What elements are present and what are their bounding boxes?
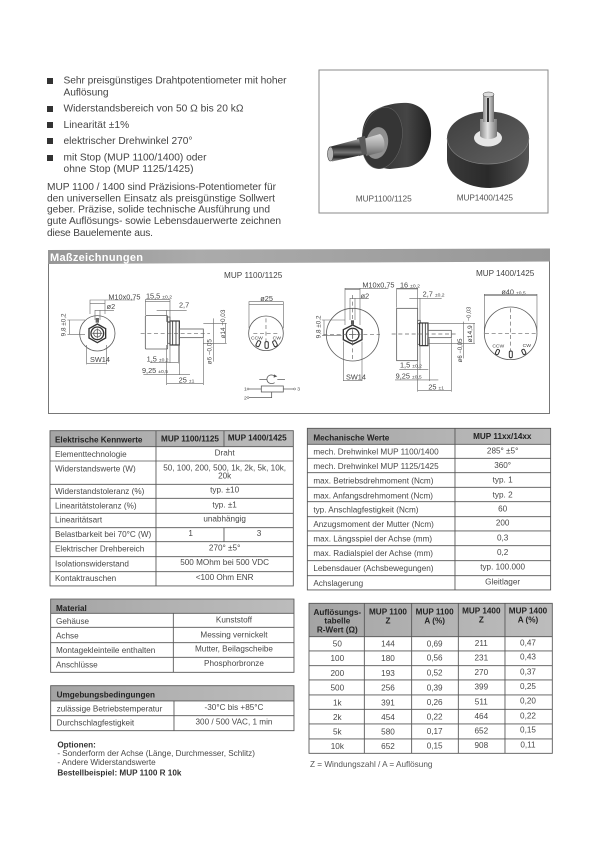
circuit symbol: 1	[244, 387, 247, 393]
table rows: Phosphorbronze	[204, 659, 264, 668]
table values: typ. 1	[493, 476, 513, 485]
circuit symbol	[244, 374, 300, 401]
front view: SW14	[90, 355, 110, 364]
table values: 20k	[218, 471, 232, 480]
table rows: Durchschlagfestigkeit	[57, 719, 135, 728]
table values: typ. 2	[493, 490, 513, 499]
table labels: Elektrischer Drehbereich	[55, 545, 144, 554]
table header	[307, 428, 551, 444]
table values: unabhängig	[203, 515, 246, 524]
column: R-Wert: 5k	[333, 727, 343, 736]
column: MUP 1400 A: 0,47	[520, 638, 536, 647]
front view: M10x0,75	[362, 281, 395, 290]
intro paragraph: gute Auflösungs- sowie Lebensdauerwerte zeichnen	[47, 216, 281, 227]
column: MUP 1400 Z: 652	[475, 726, 489, 735]
table header: A (%)	[424, 616, 445, 625]
table values: 200	[496, 519, 510, 528]
table labels: mech. Drehwinkel MUP 1100/1400	[313, 448, 439, 457]
column: MUP 1100 Z: 580	[381, 727, 395, 736]
table header: MUP 1100/1125	[161, 435, 219, 444]
side view: ø6 −0,05	[206, 339, 213, 364]
table labels: typ. Anschlagfestigkeit (Ncm)	[313, 506, 419, 515]
column: MUP 1400 A: 0,11	[520, 740, 536, 749]
table: Umgebungsbedingungen	[51, 686, 294, 731]
side view: 1,5 ±0,2	[400, 361, 422, 370]
column: MUP 1100 Z: 256	[381, 684, 395, 693]
table rows: Montagekleinteile enthalten	[56, 646, 155, 655]
column: MUP 1400 A: 0,37	[520, 667, 536, 676]
rear view: CW	[273, 335, 281, 341]
table header: A (%)	[518, 616, 539, 625]
column: MUP 1400 Z: 270	[475, 668, 489, 677]
options and order example	[57, 740, 255, 778]
table header: MUP 11xx/14xx	[473, 432, 532, 441]
side view: 2,7	[179, 301, 189, 310]
drawing title: MUP 1100/1125	[224, 271, 283, 280]
column: MUP 1100 A: 0,17	[427, 727, 443, 736]
table labels: Isolationswiderstand	[55, 560, 129, 569]
column: R-Wert: 100	[331, 654, 345, 663]
table values	[480, 447, 526, 586]
table labels: Lebensdauer (Achsbewegungen)	[313, 564, 434, 573]
table labels: Kontaktrauschen	[55, 574, 116, 583]
column: MUP 1100 A	[427, 639, 443, 751]
intro paragraph: diese Bauelemente aus.	[47, 228, 153, 239]
table rows: -30°C bis +85°C	[205, 703, 264, 712]
table rows: Messing vernickelt	[200, 630, 268, 639]
column: R-Wert: 500	[331, 684, 345, 693]
table rows: zulässige Betriebstemperatur	[57, 704, 163, 713]
front view: ø2	[361, 291, 369, 300]
table rows: Kunststoff	[216, 616, 253, 625]
table values: 285° ±5°	[487, 447, 518, 456]
column: MUP 1100 A: 0,69	[427, 639, 443, 648]
column: MUP 1100 A: 0,22	[427, 713, 443, 722]
bullet 1: Sehr preisgünstiges Drahtpotentiometer mit hoher	[64, 76, 287, 86]
bullet 5: mit Stop (MUP 1100/1400) oder	[64, 153, 207, 164]
side view: 1,5 ±0,2	[147, 354, 169, 363]
side view: 2,7 ±0,2	[423, 290, 445, 299]
table: Auflösungstabelle	[309, 603, 552, 753]
table values: typ. ±1	[212, 500, 237, 509]
column: R-Wert: 50	[333, 640, 342, 649]
bullet 3: Linearität ±1%	[64, 120, 129, 131]
bullet 2: Widerstandsbereich von 50 Ω bis 20 kΩ	[64, 104, 244, 114]
table values	[163, 449, 286, 582]
rear view	[249, 294, 283, 351]
table header	[50, 431, 293, 447]
table labels: Widerstandstoleranz (%)	[55, 487, 145, 496]
column: MUP 1400 A: 0,20	[520, 697, 536, 706]
table header	[51, 599, 294, 613]
table values: 500 MOhm bei 500 VDC	[180, 558, 269, 567]
drawing: MUP 1100/1125	[60, 271, 300, 401]
table: Material	[51, 599, 294, 672]
intro paragraph: den universellen Einsatz als preisgünstige Sollwert	[47, 194, 275, 205]
rear view: CW	[523, 343, 531, 349]
intro paragraph: geber. Präzise, solide technische Ausführung und	[47, 205, 270, 216]
side view: 9,25 ±0,5	[142, 366, 168, 375]
rear view: ø40 ±0,5	[501, 287, 526, 296]
column: MUP 1400 Z	[475, 639, 489, 750]
column: MUP 1100 A: 0,26	[427, 698, 443, 707]
column: MUP 1400 A: 0,43	[520, 653, 536, 662]
bullet 1	[47, 76, 287, 98]
side view: 16 ±0,2	[400, 280, 420, 289]
table labels: max. Längsspiel der Achse (mm)	[313, 535, 432, 544]
panel: Maßzeichnungen	[48, 248, 550, 414]
side view: ø14,9	[467, 325, 474, 342]
bullet 5: ohne Stop (MUP 1125/1425)	[64, 164, 194, 175]
bullet 1: Auflösung	[64, 88, 109, 98]
table header: MUP 1100	[369, 607, 407, 616]
table header: Material	[56, 604, 87, 613]
intro paragraph	[47, 182, 281, 239]
column: MUP 1100 Z: 180	[381, 654, 395, 663]
rear view: CCW	[492, 344, 505, 350]
table header	[51, 686, 294, 701]
table labels: Widerstandswerte (W)	[55, 465, 136, 474]
bullet 5	[47, 153, 207, 175]
side view	[392, 280, 475, 392]
table header: Z	[479, 616, 484, 625]
column: MUP 1400 Z: 211	[475, 639, 488, 648]
circuit symbol: 2	[244, 395, 247, 401]
panel heading bar: Maßzeichnungen	[50, 252, 143, 264]
column: R-Wert: 2k	[333, 713, 343, 722]
table: Elektrische Kennwerte	[50, 431, 293, 586]
front view	[316, 281, 395, 381]
drawing: MUP 1400/1425	[316, 269, 537, 392]
front view: SW14	[346, 372, 366, 381]
table rows: Gehäuse	[56, 617, 90, 626]
side view: −0,03	[467, 307, 473, 321]
table labels	[55, 450, 151, 583]
table values: 0,3	[497, 534, 509, 543]
table header: R-Wert (Ω)	[317, 625, 358, 634]
table values: 0,2	[497, 548, 509, 557]
options and order example: Optionen:	[57, 740, 96, 749]
table header: MUP 1400	[509, 607, 548, 616]
table values: 360°	[494, 461, 511, 470]
column: MUP 1100 A: 0,56	[427, 654, 443, 663]
table labels: max. Anfangsdrehmoment (Ncm)	[313, 491, 433, 500]
table rows: Mutter, Beilagscheibe	[195, 645, 273, 654]
front view	[60, 292, 141, 364]
column: MUP 1400 A: 0,15	[520, 726, 536, 735]
table header: Mechanische Werte	[313, 433, 390, 442]
photo caption right: MUP1400/1425	[457, 193, 513, 203]
table labels: Linearitätstoleranz (%)	[55, 501, 137, 510]
column: MUP 1100 Z: 193	[381, 669, 395, 678]
column: MUP 1400 A: 0,25	[520, 682, 536, 691]
side view	[141, 291, 227, 385]
product photo panel	[319, 70, 548, 213]
table labels: max. Radialspiel der Achse (mm)	[313, 549, 433, 558]
table values: Draht	[215, 449, 235, 458]
side view: 25 ±1	[428, 382, 444, 391]
table rows: Achse	[56, 632, 79, 641]
column: MUP 1100 Z: 144	[381, 640, 395, 649]
rear view	[484, 287, 537, 360]
side view: 9,25 ±0,5	[396, 371, 422, 380]
table rows	[56, 616, 273, 669]
rear view: ø25	[260, 294, 273, 303]
side view: 25 ±1	[179, 375, 195, 384]
table values: typ. ±10	[210, 486, 240, 495]
table labels: Linearitätsart	[55, 516, 103, 525]
table: Mechanische Werte	[307, 428, 551, 590]
table labels: mech. Drehwinkel MUP 1125/1425	[313, 462, 439, 471]
table header: MUP 1400/1425	[228, 434, 287, 443]
table rows: Anschlüsse	[56, 660, 98, 669]
table header: Z	[385, 616, 390, 625]
circuit symbol: 3	[297, 387, 300, 393]
column: MUP 1400 Z: 399	[475, 683, 489, 692]
column: MUP 1100 Z: 391	[381, 698, 395, 707]
table header: Elektrische Kennwerte	[55, 436, 143, 445]
table footnote: Z = Windungszahl / A = Auflösung	[310, 760, 433, 769]
table header	[309, 603, 552, 637]
table labels: max. Betriebsdrehmoment (Ncm)	[313, 477, 434, 486]
bullet 4: elektrischer Drehwinkel 270°	[64, 136, 192, 147]
column: R-Wert: 1k	[333, 698, 343, 707]
table values: <100 Ohm ENR	[196, 573, 254, 582]
column: MUP 1400 Z: 464	[475, 712, 489, 721]
table values: 3	[257, 529, 262, 538]
column: MUP 1400 Z: 908	[475, 741, 489, 750]
column: R-Wert	[331, 640, 345, 751]
front view: 9,8 ±0,2	[316, 315, 323, 338]
feature list	[47, 76, 287, 175]
intro paragraph: MUP 1100 / 1400 sind Präzisions-Potentiometer für	[47, 182, 277, 193]
panel heading bar	[48, 248, 550, 264]
column: MUP 1400 A: 0,22	[520, 711, 536, 720]
side view: ø14 −0,03	[220, 309, 227, 338]
drawing title: MUP 1400/1425	[476, 269, 535, 278]
table header: Umgebungsbedingungen	[57, 691, 155, 700]
column: MUP 1100 Z: 454	[381, 713, 395, 722]
options and order example: - Andere Widerstandswerte	[57, 758, 156, 767]
table header: tabelle	[324, 616, 351, 625]
front view: 9,8 ±0,2	[60, 313, 67, 336]
side view: ø6 −0,05	[458, 338, 464, 362]
column: R-Wert: 10k	[331, 742, 345, 751]
column: MUP 1100 A: 0,39	[427, 683, 443, 692]
table values: 1	[188, 529, 193, 538]
table labels	[313, 448, 439, 588]
front view: M10x0,75	[108, 292, 141, 301]
column: R-Wert: 200	[331, 669, 345, 678]
column: MUP 1100 Z	[381, 640, 395, 751]
column: MUP 1100 A: 0,15	[427, 742, 443, 751]
photo: MUP1400 potentiometer	[447, 92, 529, 188]
table labels: Achslagerung	[313, 579, 364, 588]
table values: typ. 100.000	[480, 563, 526, 572]
table labels: Anzugsmoment der Mutter (Ncm)	[313, 520, 434, 529]
table values: 50, 100, 200, 500, 1k, 2k, 5k, 10k,	[163, 464, 286, 473]
front view: ø2	[107, 302, 115, 311]
table header: MUP 1100	[416, 607, 454, 616]
column: MUP 1400 Z: 511	[475, 697, 488, 706]
photo: MUP1100 potentiometer	[328, 103, 431, 172]
photo caption left: MUP1100/1125	[356, 194, 412, 204]
table values: 270° ±5°	[209, 543, 240, 552]
rear view: CCW	[251, 335, 263, 341]
column: MUP 1400 A	[520, 638, 536, 749]
table header: Auflösungs-	[314, 608, 361, 617]
table labels: Belastbarkeit bei 70°C (W)	[55, 530, 151, 539]
options and order example: - Sonderform der Achse (Länge, Durchmesser, Schlitz)	[57, 749, 255, 758]
column: MUP 1400 Z: 231	[475, 653, 489, 662]
column: MUP 1100 A: 0,52	[427, 669, 443, 678]
side view: 15,5 ±0,2	[146, 291, 172, 300]
table values: 60	[498, 505, 508, 514]
table header: MUP 1400	[462, 607, 501, 616]
options and order example: Bestellbeispiel: MUP 1100 R 10k	[57, 769, 182, 778]
column: MUP 1100 Z: 652	[381, 742, 395, 751]
table rows	[57, 703, 272, 728]
table values: Gleitlager	[485, 577, 520, 586]
table rows: 300 / 500 VAC, 1 min	[196, 717, 272, 726]
table labels: Elementtechnologie	[55, 450, 127, 459]
